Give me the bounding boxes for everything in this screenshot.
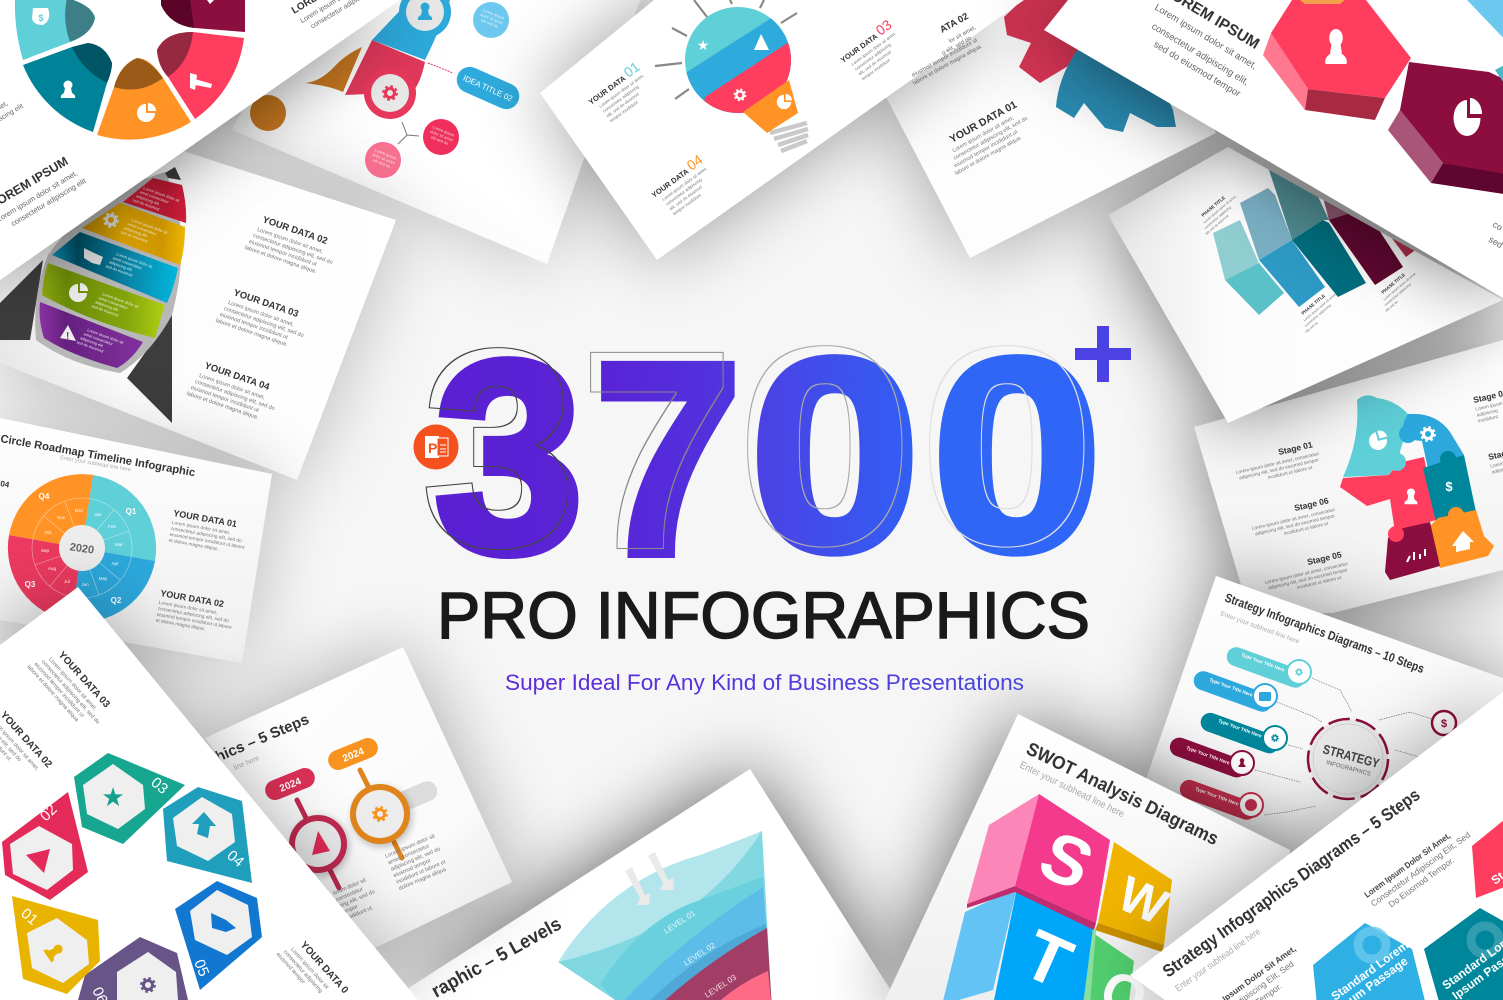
- labels: phases: consectetur adipiscing: [1304, 303, 1332, 328]
- text: lorem body: sed do eiusmod tempor: [1151, 39, 1242, 100]
- slide: circle roadmap timeline: [0, 418, 272, 663]
- labels: phases: elit sed do: [1384, 300, 1399, 313]
- outline digits: 0: [923, 294, 1091, 599]
- text: steps body: incididunt ut labore et: [395, 859, 447, 886]
- text: rocket bands: amet consectetur: [127, 221, 158, 237]
- chart: 2020 donut: Q1: [126, 507, 137, 516]
- text: stage 01: Stage 01: [1277, 439, 1314, 457]
- text: your data 01: eiusmod tempor incididunt ut: [953, 129, 1019, 169]
- icons: donut: [32, 0, 214, 122]
- text: stage 06: [1248, 494, 1339, 544]
- text: steps body: lorum dolor sit: [332, 877, 368, 897]
- outline digits: [425, 294, 1091, 602]
- text: rocket bands: Lorem ipsum dolor sit: [131, 217, 169, 235]
- text: stage 02: adipiscing: [1476, 408, 1499, 419]
- letters: SWOT: S: [1028, 817, 1105, 904]
- text: rocket bands: [76, 183, 181, 359]
- pill: idea title: [453, 63, 523, 113]
- text: rocket bands: Lorem ipsum dolor sit: [143, 185, 181, 203]
- text: stage 06: Stage 06: [1293, 495, 1330, 513]
- icons: bulb: ★: [697, 37, 709, 53]
- outline digits: 3: [425, 297, 573, 601]
- text: rocket bands: adipiscing elit: [123, 225, 149, 238]
- text: rocket bands: Lorem ipsum dolor sit: [102, 291, 140, 309]
- letters: SWOT: [1012, 817, 1177, 1000]
- text: data 02: Lorem ipsum dolor sit amet,: [158, 600, 218, 616]
- text: your data 02: consectetur adipiscing elit, sed do: [252, 233, 333, 266]
- text: steps body: incididunt ut: [343, 905, 374, 923]
- text: data 02: eiusmod tempor incididunt ut labore: [156, 612, 232, 631]
- bubbles: elit sed do: [430, 135, 450, 146]
- text: your data 02 on gear slide: eiusmod tempor incididunt ut: [911, 37, 979, 79]
- slide: timeline 5 steps: [205, 647, 512, 948]
- text: steps body: dolore magna aliqua: [398, 866, 448, 892]
- text: your data 02 on gear slide: [911, 11, 984, 87]
- text: data 0 bottom: consectetur adipiscing: [282, 949, 323, 994]
- text: stage 05: adipiscing elit, sed do eiusmod tempor: [1268, 567, 1349, 591]
- pill steps: [1167, 645, 1311, 822]
- text: your data 01: Lorem ipsum dolor sit amet,: [952, 115, 1015, 154]
- labels: phases: PHASE TITLE: [1200, 195, 1226, 218]
- text: data 03: YOUR DATA: [839, 31, 880, 65]
- text: rocket bands: amet consectetur: [139, 189, 170, 205]
- text: your data 03: Lorem ipsum dolor sit amet,: [227, 300, 295, 328]
- labels: phases: Lorem ipsum dolor sit amet,: [1203, 194, 1237, 224]
- text: data 01: [583, 58, 657, 127]
- labels: phases: PHASE TITLE: [1300, 293, 1326, 316]
- text: data 01: tempor incididunt: [609, 99, 639, 123]
- text: stage 06: adipiscing elit, sed do eiusmod tempor: [1255, 513, 1336, 537]
- text: your data 01: [937, 97, 1036, 177]
- text: data 01: YOUR DATA 01: [173, 508, 238, 529]
- subheading: SWOT: Enter your subhead line here: [1018, 760, 1126, 820]
- text: steps body: amet, consectetur: [387, 843, 431, 866]
- chart: 2020 donut: May: [99, 576, 108, 581]
- chart: 2020 donut: Jan: [94, 512, 102, 517]
- heading: 5 steps: hics – 5 Steps: [213, 711, 312, 766]
- text: your data 02 on gear slide: labore et dolore magna aliqua.: [912, 43, 984, 87]
- text: data 01: YOUR DATA: [587, 73, 628, 107]
- pill steps: Type Your Title Here: [1208, 677, 1254, 699]
- slide: donut six segments top left: [0, 0, 400, 280]
- text: steps body: sing elit, sed do: [338, 889, 376, 910]
- subheading: strategy 5: Enter your subhead line here: [1173, 926, 1263, 994]
- icons: puzzle: [1367, 427, 1474, 562]
- hexagon 02: 02: [37, 801, 61, 825]
- text: rocket bands: amet consectetur: [112, 255, 143, 271]
- icon: ring person: [399, 0, 451, 38]
- text: stage 01: adipiscing elit, sed do eiusmod tempor: [1239, 457, 1320, 481]
- text: right caption: Do Eiusmod Tempor.: [1387, 855, 1456, 909]
- text: steps body: eiusmod tempor: [393, 858, 432, 879]
- icon: maroon step: [1432, 711, 1456, 735]
- text: data 0 bottom: YOUR DATA 0: [298, 940, 350, 996]
- hexagon: maroon pie: [1388, 62, 1503, 195]
- text: lorem body: [1149, 2, 1259, 100]
- icon: maroon step: $: [1441, 718, 1447, 730]
- hexagon: red: [1472, 815, 1503, 898]
- text: lorem right: [290, 0, 382, 35]
- slide: strategy 10 steps: [1146, 576, 1503, 900]
- text: your data 01: YOUR DATA 01: [948, 99, 1019, 146]
- hexagon 04: 04: [223, 847, 247, 871]
- pill steps: Type Your Title Here: [1240, 652, 1286, 674]
- hexagon 01: 01: [17, 905, 41, 929]
- heading: circle roadmap: Circle Roadmap Timeline Infographic: [0, 433, 196, 479]
- bubbles: elit sed do: [372, 158, 392, 169]
- chart: 2020 donut: Aug: [48, 566, 56, 571]
- icons: rocket: [60, 213, 118, 342]
- text: stage 01: [1232, 438, 1323, 488]
- icon: PowerPoint badge: P: [428, 440, 437, 456]
- labels: phases: consectetur adipiscing: [1384, 282, 1412, 307]
- chart: 2020 donut: Sep: [41, 548, 49, 553]
- slide: hexagon steps top right: [1044, 0, 1503, 298]
- strategy circle: INFOGRAPHICS: [1325, 760, 1371, 778]
- chart: 2020 donut: Q2: [111, 596, 122, 605]
- text: stage 01: Lorem ipsum dolor sit amet, consectetur: [1235, 451, 1320, 476]
- heading: funnel: raphic – 5 Levels: [428, 914, 565, 1000]
- outline digits: 7: [584, 297, 730, 602]
- text: rocket bands: adipiscing elit: [94, 299, 120, 312]
- text: data 0 bottom: eiusmod tempor: [275, 952, 306, 986]
- text: rocket bands: sed do eiusmod: [76, 339, 104, 354]
- text: lorem body: consectetur adipiscing elit,: [1149, 21, 1251, 88]
- slide: SWOT: [885, 714, 1290, 1000]
- heading: strategy 10: Strategy Infographics Diagrams – 10 Steps: [1223, 591, 1426, 676]
- subtitle: Super Ideal For Any Kind of Business Presentations: [505, 670, 1024, 695]
- hexagon 03: 03: [147, 774, 171, 798]
- text: stage 05: Lorem ipsum dolor sit amet, consectetur: [1264, 561, 1349, 586]
- text: data 03: [27, 650, 110, 724]
- text: data 03: consectetur adipiscing elit, sed do: [40, 659, 101, 726]
- labels: phases: Lorem ipsum dolor sit amet,: [1383, 271, 1417, 301]
- text: stage 05: [1261, 548, 1352, 598]
- text: data 0 bottom: Lorem ipsum dolor sit: [289, 947, 330, 991]
- text: data 01: elit, sed do eiusmod: [605, 91, 640, 118]
- icons: puzzle: $: [1445, 479, 1453, 494]
- text: stage 02: incididunt: [1478, 414, 1499, 424]
- bubbles: dolor sit amet: [479, 12, 504, 26]
- slide: gears: [885, 0, 1216, 258]
- number: 3700 plus: 3: [435, 306, 583, 610]
- text: data 03: [835, 16, 909, 85]
- slide: hexagon cycle: [0, 587, 418, 1000]
- text: data 03: elit, sed do eiusmod: [857, 49, 892, 76]
- hexagon: blue: [1313, 923, 1426, 1000]
- chart: 2020 donut: Jul: [64, 579, 70, 584]
- text: lorem body: Lorem ipsum dolor sit amet,: [1152, 2, 1259, 72]
- chart: 2020 donut: Mar: [115, 542, 123, 547]
- text: your data 02: Lorem ipsum dolor sit amet,: [256, 227, 324, 255]
- text: right caption: Lorem Ipsum Dolor Sit Amet,: [1362, 830, 1452, 900]
- text: stage 01: incididunt ut labore et: [1267, 465, 1314, 481]
- text: data 03: Lorem ipsum dolor sit amet,: [850, 31, 897, 67]
- subheading: strategy 10: Enter your subhead line here: [1219, 610, 1301, 646]
- bubbles: dolor sit amet: [429, 129, 454, 143]
- text: data 02: et dolore magna aliqua.: [155, 618, 206, 632]
- chart: 2020 donut: Q3: [25, 580, 36, 589]
- icon: ring gear: [364, 67, 416, 119]
- title: pro infographics: PRO INFOGRAPHICS: [437, 578, 1090, 652]
- chart: 3D bars: [1213, 160, 1418, 315]
- text: data 03: Lorem ipsum dolor sit amet,: [47, 657, 98, 712]
- pill steps: Type Your Title Here: [1217, 718, 1263, 740]
- labels: phases: PHASE TITLE: [1380, 272, 1406, 295]
- text: your data 04: consectetur adipiscing elit, sed do: [194, 379, 275, 412]
- chart: gears: [1004, 0, 1176, 132]
- labels: funnel levels: [662, 908, 739, 1000]
- text: steps body: tempor: [341, 904, 359, 916]
- slide: 3D phase bars: [1108, 147, 1503, 423]
- text: data 04: elit, sed do eiusmod: [668, 184, 703, 211]
- text: rocket bands: Lorem ipsum dolor sit: [116, 251, 154, 269]
- hexagon 02: [2, 792, 88, 900]
- text: data 04: tempor incididunt: [672, 192, 702, 216]
- text: data 04: Lorem ipsum dolor sit amet,: [661, 166, 708, 202]
- text: data 04: YOUR DATA: [650, 166, 691, 200]
- text: data 01: Lorem ipsum dolor sit amet,: [598, 73, 645, 109]
- letters: SWOT: W: [1110, 865, 1177, 936]
- text: rocket bands: amet consectetur: [98, 295, 129, 311]
- number: 3700 plus: 0: [751, 303, 919, 608]
- text: data 01: consectetur adipiscing: [602, 84, 640, 114]
- arrows: funnel: [625, 852, 674, 905]
- pill steps: Type Your Title Here: [1185, 745, 1231, 767]
- bubbles: [365, 2, 509, 178]
- pill: idea title: IDEA TITLE 02: [462, 74, 514, 104]
- text: stage 05: incididunt ut labore et: [1296, 575, 1343, 591]
- text: your data 03: labore et dolore magna aliqua.: [215, 318, 289, 348]
- text: steps body: adipiscing elit, sed do: [390, 846, 441, 873]
- text: stage fragment: [1487, 448, 1503, 476]
- text: your data 02: [244, 212, 340, 279]
- chart: 2020 donut: Dec: [75, 508, 84, 513]
- chart: 2020 donut: Q4: [39, 492, 50, 501]
- text: data 02: consectetur adipiscing elit, sed do: [157, 606, 229, 624]
- text: stage 02: [1472, 387, 1503, 424]
- text: right caption: Consectetur Adipiscing Elit, Sed: [1369, 829, 1472, 909]
- number: 3700 plus: 0: [933, 303, 1101, 608]
- slide: timeline 5 steps: line here: [233, 755, 261, 772]
- labels: funnel levels: LEVEL 03: [703, 972, 739, 1000]
- text: steps body: Lorem ipsum dolor sit: [384, 833, 436, 860]
- labels: phases: Lorem ipsum dolor sit amet,: [1303, 292, 1337, 322]
- labels: phases: consectetur adipiscing: [1204, 205, 1232, 230]
- text: your data 03: eiusmod tempor incididunt ut: [219, 312, 289, 341]
- chart: 2020 donut: Nov: [57, 515, 66, 520]
- step: red 2024: [262, 765, 349, 888]
- strategy circle: STRATEGY: [1321, 741, 1381, 771]
- text: your data 02: YOUR DATA 02: [261, 214, 329, 247]
- text: your data 03: YOUR DATA 03: [232, 287, 300, 320]
- labels: phases: elit sed do: [1304, 321, 1319, 334]
- text: your data 04: Lorem ipsum dolor sit amet,: [198, 373, 266, 401]
- text: data 03: tempor incididunt: [861, 57, 891, 81]
- text: your data 02 on gear slide: ATA 02: [938, 11, 971, 36]
- heading: SWOT: SWOT Analysis Diagrams: [1023, 738, 1222, 849]
- text: data 01: Lorem ipsum dolor sit amet,: [171, 520, 231, 536]
- step: orange 2024: [325, 735, 412, 858]
- text: your data 04: eiusmod tempor incididunt ut: [190, 385, 260, 414]
- bubbles: Lorem ipsum: [482, 7, 506, 21]
- text: data 03: 03: [873, 16, 895, 38]
- pill steps: Type Your Title Here: [1194, 786, 1240, 808]
- text: data 01: consectetur adipiscing elit, sed do: [170, 526, 242, 544]
- hexagon 04: [163, 787, 252, 883]
- bubbles: dolor sit amet: [371, 152, 396, 166]
- chart: 2020 donut: Feb: [108, 524, 116, 529]
- text: your data 01: consectetur adipiscing elit, sed do: [953, 116, 1029, 162]
- text: rocket bands: Lorem ipsum dolor sit: [87, 327, 125, 345]
- text: your data 03: [215, 285, 311, 352]
- strategy circle: [1308, 719, 1388, 799]
- outline digits: 0: [741, 294, 909, 599]
- slide: rocket: [0, 145, 396, 480]
- text: data 0 bottom: [276, 940, 348, 994]
- text: stage 06: incididunt ut labore et: [1283, 521, 1330, 537]
- icons: pill steps: [1238, 669, 1302, 811]
- labels: funnel levels: LEVEL 01: [662, 908, 698, 936]
- text: your data 04: labore et dolore magna aliqua.: [186, 391, 260, 421]
- text: your data 02: eiusmod tempor incididunt ut: [248, 239, 318, 268]
- icon: bulb: [655, 0, 808, 151]
- icon: PowerPoint badge: [414, 424, 458, 470]
- text: your data 03: consectetur adipiscing elit, sed do: [223, 306, 304, 339]
- chart: 2020 donut: Apr: [111, 561, 119, 566]
- text: data 04: 04: [684, 151, 706, 173]
- text: data 03: labore et dolore magna aliqua: [25, 664, 80, 724]
- text: rocket bands: adipiscing elit: [108, 259, 134, 272]
- bubbles: Lorem ipsum: [374, 147, 398, 161]
- hexagon: red person: [1263, 0, 1411, 120]
- text: rocket bands: adipiscing elit: [79, 335, 105, 348]
- text: your data 04: [186, 358, 282, 425]
- slide: light bulb: [540, 0, 1024, 260]
- hexagon 05: 05: [190, 957, 212, 979]
- text: rocket bands: sed do eiusmod: [91, 303, 119, 318]
- hexagon 01: [12, 896, 100, 994]
- slide: idea title diagram: [232, 0, 640, 264]
- hexagon 03: [74, 753, 185, 844]
- number: 3700 plus: [425, 294, 1131, 611]
- text: data 03: consectetur adipiscing: [854, 42, 892, 72]
- connectors: [1255, 678, 1435, 815]
- text: stage 05: Stage 05: [1306, 549, 1343, 567]
- bubbles: elit sed do: [480, 18, 500, 29]
- text: your data 04: YOUR DATA 04: [203, 360, 271, 393]
- chart: 2020 donut: [8, 474, 156, 622]
- chart: segmented donut: [15, 0, 245, 140]
- text: data 03: YOUR DATA 03: [56, 650, 112, 710]
- text: rocket bands: sed do eiusmod: [120, 229, 148, 244]
- text: data 02: YOUR DATA 02: [160, 588, 225, 609]
- icons: rocket: !: [66, 331, 69, 342]
- hexagon 06: [78, 937, 188, 1000]
- text: lorem fragment: [0, 82, 25, 124]
- slide: funnel 5 levels: [400, 769, 897, 1000]
- text: data 01: [168, 508, 250, 557]
- labels: funnel levels: LEVEL 02: [682, 940, 718, 968]
- labels: phases: elit sed do eiusmod: [1204, 214, 1230, 236]
- text: lorem left: consectetur adipiscing elit: [9, 176, 88, 228]
- text: rocket bands: adipiscing elit: [135, 193, 161, 206]
- plus sign: [1075, 326, 1131, 382]
- slide: puzzle stages: [1194, 340, 1503, 615]
- chart: 2020 donut: Jun: [81, 582, 89, 587]
- text: your data 01: labore et dolore magna aliqua.: [954, 135, 1024, 177]
- text: data 01: 01: [621, 58, 643, 80]
- number: 3700 plus: 7: [595, 306, 741, 611]
- text: data 02: [155, 588, 237, 637]
- bubbles: Lorem ipsum: [432, 124, 456, 138]
- text: lorem left: [0, 151, 88, 233]
- chart: 2020 donut: 2020: [69, 541, 95, 557]
- labels: phases: [1194, 189, 1424, 334]
- hexagon fragments: [1300, 0, 1503, 92]
- chart: puzzle horse: [1340, 395, 1494, 580]
- text: steps body: consectetur: [335, 886, 364, 903]
- hexagon 05: [175, 881, 262, 990]
- icons: donut: $: [38, 13, 44, 23]
- chart: 2020 donut: Oct: [44, 530, 52, 535]
- text: rocket bands: sed do eiusmod: [132, 197, 160, 212]
- text: fragments: [1487, 219, 1503, 250]
- hexagon 03: ★: [101, 782, 125, 812]
- text: your data 02 on gear slide: lor sit amet,: [948, 25, 978, 45]
- hexagon: teal: [1424, 908, 1503, 1000]
- text: data 04: consectetur adipiscing: [665, 177, 703, 207]
- text: data 01: et dolore magna aliqua.: [168, 538, 219, 552]
- text: stage 06: Lorem ipsum dolor sit amet, consectetur: [1251, 507, 1336, 532]
- chart: funnel: [558, 831, 772, 1000]
- text: rocket bands: amet consectetur: [83, 331, 114, 347]
- text: data 01: eiusmod tempor incididunt ut labore: [169, 532, 245, 551]
- text: rocket bands: sed do eiusmod: [105, 263, 133, 278]
- cubes: [942, 794, 1172, 1000]
- heading: strategy 5: Strategy Infographics Diagrams – 5 Steps: [1159, 784, 1424, 981]
- text: steps body: [332, 833, 450, 923]
- text: your data 02: labore et dolore magna aliqua.: [244, 245, 318, 275]
- rocket graphic: [0, 167, 186, 423]
- text: your data 02 on gear slide: g elit, sed do: [941, 36, 973, 57]
- subheading: Enter your subhead line here: [60, 455, 131, 473]
- slide: strategy 5 steps: [1130, 692, 1503, 1000]
- text: data 03: eiusmod tempor incididunt ut: [33, 662, 85, 719]
- text: stage 02: Lorem ipsum: [1475, 401, 1503, 413]
- text: data 04: [646, 151, 720, 220]
- step: red 2024: 2024: [278, 776, 303, 795]
- icons: bulb: [697, 34, 792, 109]
- step: orange 2024: 2024: [341, 746, 366, 765]
